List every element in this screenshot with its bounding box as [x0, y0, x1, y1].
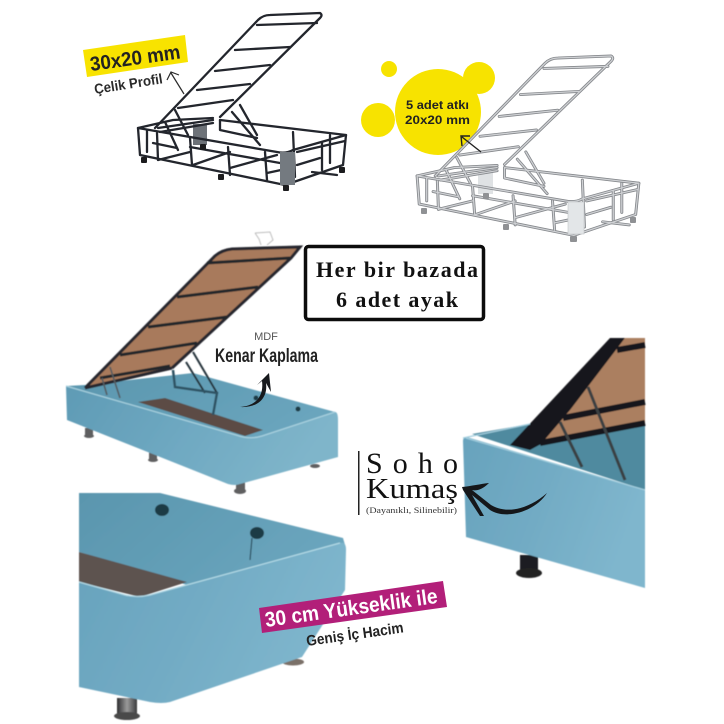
callout: six legs: 6 adet ayak	[336, 287, 459, 312]
inner walls	[66, 373, 335, 440]
divider bar	[358, 451, 360, 515]
panel: dark steel frame	[83, 13, 346, 191]
interior	[472, 420, 645, 490]
label: Çelik Profil: Çelik Profil	[93, 70, 164, 97]
label: Kumaş: Kumaş	[366, 473, 458, 505]
arrow: edge covering	[240, 373, 271, 407]
yellow blob	[361, 61, 495, 155]
gas struts	[560, 387, 625, 480]
label: 5 adet atkı 20x20 mm: 5 adet atkı	[406, 100, 469, 112]
callout: six legs	[306, 246, 484, 320]
dark frame drawing	[138, 13, 346, 191]
legs	[117, 698, 137, 714]
label: Soho: Soho	[366, 447, 458, 480]
label: durable wipeable: (Dayanıklı, Silinebilir)	[366, 505, 457, 515]
storage floor	[79, 552, 187, 597]
fabric bed corner	[463, 338, 645, 588]
brown panel	[540, 338, 645, 440]
arrow: fabric pointer	[462, 483, 547, 516]
bed illustration	[66, 232, 338, 494]
label: MDF: MDF	[254, 331, 278, 343]
lid frame	[85, 247, 300, 388]
panel: main upholstered bed	[66, 232, 338, 494]
leg	[520, 555, 538, 570]
legs	[84, 428, 320, 494]
hook outline	[255, 232, 273, 245]
silver frame drawing	[417, 56, 639, 242]
connectors	[155, 504, 169, 516]
pink badge: 30 cm Yükseklik ile	[263, 585, 439, 632]
black rails	[510, 338, 625, 450]
label: 30x20 mm: 30x20 mm	[89, 42, 182, 76]
floor	[138, 398, 263, 436]
front face	[79, 543, 346, 703]
inner wall	[79, 493, 345, 585]
blue face	[463, 437, 645, 588]
arrow: crossbar pointer	[461, 136, 481, 152]
callout: six legs: Her bir bazada	[316, 257, 478, 282]
panel: height close-up	[79, 493, 447, 720]
label: 5 adet atkı 20x20 mm: 20x20 mm	[405, 115, 470, 127]
label: Geniş İç Hacim: Geniş İç Hacim	[305, 619, 405, 650]
storage bed corner	[79, 493, 346, 720]
lift mechanism	[186, 352, 217, 393]
arrow: profile pointer	[167, 72, 184, 94]
front face	[66, 386, 338, 485]
panel: Soho fabric close-up	[358, 338, 645, 588]
panel: silver frame	[361, 56, 639, 242]
brown lid	[85, 247, 302, 388]
label: Kenar Kaplama: Kenar Kaplama	[215, 346, 318, 367]
